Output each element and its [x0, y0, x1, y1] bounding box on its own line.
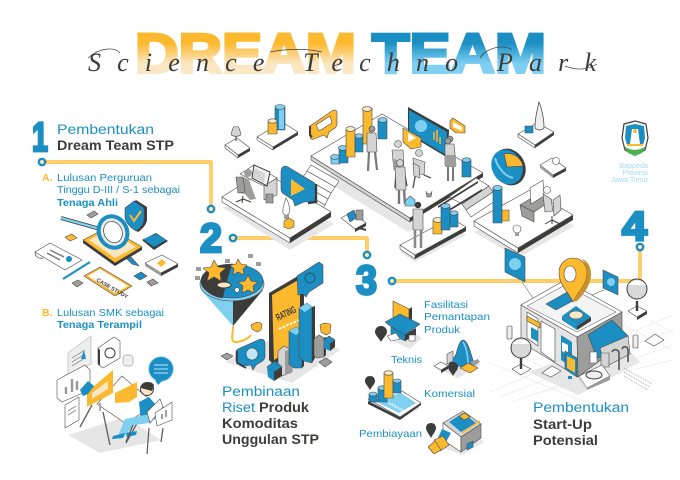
text: section 2 label: Produk — [259, 400, 310, 415]
text: Fasilitasi Pemantapan Produk — [424, 299, 490, 336]
connector line 2 to 3 — [230, 235, 370, 258]
title: DREAM — [135, 22, 356, 84]
stairs left — [294, 165, 339, 211]
text: item A: Lulusan Perguruan — [57, 172, 152, 184]
title — [88, 22, 597, 84]
fountain — [579, 365, 610, 390]
small pads — [507, 326, 664, 377]
title: Science Techno Park — [88, 48, 596, 77]
kiosk sign — [565, 351, 577, 379]
person — [112, 382, 156, 439]
section 4 number: 4 — [622, 203, 647, 249]
icon: tablet with bars — [365, 371, 421, 420]
text: item B: Lulusan SMK sebagai — [57, 307, 164, 319]
icon: tablet with bars: MMMMM — [388, 400, 405, 413]
text: Fasilitasi Pemantapan Produk: Fasilitasi — [424, 299, 468, 311]
icon: yellow laptop — [115, 382, 137, 403]
text: item A: Tinggu D-III / S-1 sebagai — [57, 184, 180, 196]
illustration: funnel and phone rating — [195, 254, 340, 383]
chair — [126, 399, 172, 454]
icon: chart card — [57, 365, 90, 402]
icon: certificate — [35, 243, 82, 270]
icon: yellow monitor — [87, 370, 113, 411]
icon: camera card — [98, 337, 120, 368]
person standing back — [395, 160, 406, 204]
text: item A — [42, 172, 180, 209]
icon: play bubble large — [281, 166, 316, 206]
lamp and cube — [283, 198, 294, 229]
icon: speech bubble — [148, 356, 174, 385]
icon: video card — [403, 128, 421, 149]
text: section 2 label: Unggulan STP — [222, 432, 319, 447]
connector line 1 to 2 — [39, 159, 214, 212]
text: section 4 label: Potensial — [533, 433, 598, 448]
lamp platform upper right — [518, 102, 554, 148]
section 3 number: 3 — [356, 257, 377, 303]
section 1 heading — [32, 114, 174, 160]
icon: case study card: CASE STUDY — [95, 278, 129, 301]
desk — [80, 376, 156, 445]
bar chart — [267, 303, 335, 381]
person foreground — [413, 202, 423, 248]
bars platform — [257, 104, 298, 150]
text: section 2 label: Komoditas — [222, 416, 298, 431]
icon: blue cube — [405, 196, 415, 206]
store body — [521, 280, 622, 377]
workstation left — [236, 165, 277, 203]
text: Fasilitasi Pemantapan Produk: Pemantapan — [424, 311, 490, 323]
funnel — [200, 259, 264, 342]
lamp — [513, 225, 521, 236]
small bin platform — [341, 210, 366, 232]
text: section 2 label: Pembinaan — [222, 384, 300, 399]
text: section 4 label — [533, 400, 629, 448]
icon: blue tablet — [142, 233, 168, 250]
text: Bappeda Provinsi Jawa Timur: Bappeda — [619, 161, 648, 170]
panel: desk platform left — [222, 171, 331, 243]
text: Fasilitasi Pemantapan Produk: Produk — [424, 324, 461, 336]
small lamp platform right — [540, 158, 566, 178]
floor grid — [490, 310, 673, 402]
text: item A: Tenaga Ahli — [57, 197, 118, 209]
tag left — [505, 248, 533, 298]
lamp platform — [225, 126, 250, 158]
icon: product box — [375, 301, 422, 349]
panel: upper platform — [311, 114, 483, 222]
tag right — [592, 270, 618, 295]
woman presenter right — [445, 138, 471, 177]
text: item B: B. — [42, 307, 53, 319]
street lamp right — [627, 279, 647, 320]
text: item A: A. — [42, 172, 53, 184]
stairs right — [438, 178, 498, 217]
connector line 3 to 4 — [389, 244, 643, 284]
illustration: central isometric workspace — [222, 102, 574, 262]
illustration: start-up store — [490, 248, 673, 402]
presentation screen — [408, 107, 449, 158]
text: Bappeda Provinsi Jawa Timur — [611, 161, 649, 184]
illustration: worker at desk — [57, 336, 174, 454]
icon: sad face bubble — [297, 262, 323, 297]
section 1 heading: 1 — [32, 114, 48, 160]
panel: desk platform right — [474, 190, 573, 253]
icon: warehouse and truck — [426, 411, 484, 455]
text: Pembiayaan: Pembiayaan — [359, 428, 422, 440]
person standing — [367, 126, 377, 171]
icon: play bubble — [236, 339, 265, 370]
person standing near screen — [445, 136, 456, 181]
panel: lower bars platform — [400, 204, 466, 259]
text: Bappeda Provinsi Jawa Timur: Jawa Timur — [611, 175, 649, 184]
seated audience — [392, 140, 431, 188]
street lamp left — [511, 338, 531, 375]
title: TEAM — [372, 22, 546, 84]
text: Teknis: Teknis — [391, 354, 422, 366]
icon: magnifier — [61, 212, 132, 252]
text: section 4 label: Start-Up — [533, 417, 592, 432]
illustration: graduate book, magnifier, shield — [35, 200, 178, 301]
map pin — [559, 258, 591, 302]
text: item B: Tenaga Terampil — [57, 319, 142, 331]
text: section 2 label: Riset — [222, 400, 255, 415]
icon: pen — [63, 262, 90, 279]
icon: document — [65, 397, 79, 428]
cylinders on platform — [330, 107, 387, 164]
icon: technical hill — [434, 340, 481, 378]
section 1 heading: Dream Team STP — [57, 138, 174, 153]
workstation right — [493, 180, 561, 224]
logo: Bappeda crest — [622, 121, 648, 156]
text: section 4 label: Pembentukan — [533, 400, 629, 415]
text: item B — [42, 307, 164, 331]
awning shop — [588, 320, 652, 390]
phone: RATING — [274, 305, 298, 324]
icon: small mail bubble — [450, 118, 465, 133]
icon: badge box — [145, 255, 178, 276]
roof items — [546, 290, 591, 330]
icon: document card — [68, 336, 91, 376]
text: Bappeda Provinsi Jawa Timur: Provinsi — [622, 168, 648, 177]
section 1 heading: Pembentukan — [57, 122, 154, 137]
phone — [269, 276, 304, 365]
icon: pie chart — [485, 143, 532, 191]
text: Komersial: Komersial — [424, 388, 475, 400]
text: section 2 label — [222, 384, 319, 447]
icon: case study card — [84, 267, 132, 301]
section 2 number: 2 — [200, 215, 222, 261]
icon: shield — [125, 200, 147, 232]
icon: mail bubble — [310, 110, 337, 139]
